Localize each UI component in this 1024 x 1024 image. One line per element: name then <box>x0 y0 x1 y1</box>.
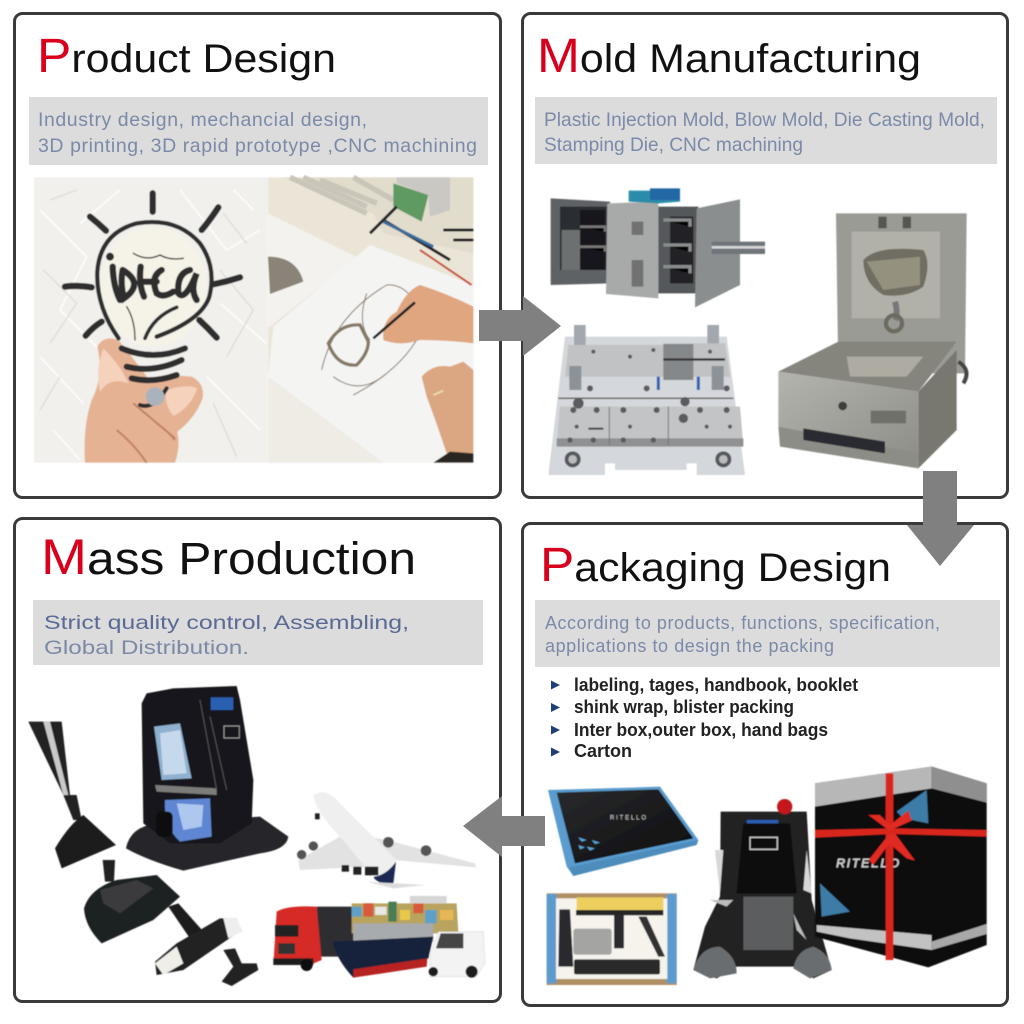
photo: vacuum in package view <box>693 799 832 978</box>
bullet list: shink wrap, blister packing <box>574 697 794 717</box>
description: mass production: Strict quality control, Assembling, <box>44 612 409 634</box>
photo: die casting mold <box>778 213 967 468</box>
photo: injection mold <box>551 188 765 307</box>
description: product design <box>29 97 488 165</box>
bullet list: labeling, tages, handbook, booklet <box>574 675 858 695</box>
heading: mold manufacturing: Mold Manufacturing <box>537 30 921 83</box>
photo: designer sketching on paper <box>268 177 473 463</box>
wand nozzle <box>28 722 116 868</box>
panel: mass production <box>14 518 500 1002</box>
arrow: mold to packaging <box>907 471 974 566</box>
photo: gift box with red ribbon <box>815 767 987 967</box>
description: product design: Industry design, mechancial design, <box>38 109 367 131</box>
description: mold manufacturing <box>535 97 997 164</box>
power head <box>84 860 258 986</box>
photo: idea light bulb drawn on crumpled paper <box>34 177 268 463</box>
bulb <box>65 193 240 406</box>
vacuum body <box>126 686 288 871</box>
panel: product design <box>14 14 500 498</box>
photo: open box with accessories <box>547 893 677 985</box>
heading: product design: Product Design <box>37 30 336 83</box>
photo: gift box with red ribbon: RITELLO <box>836 856 899 870</box>
bullet list: Carton <box>574 741 632 761</box>
photo: truck, cargo ship and van <box>273 896 485 978</box>
arrow: packaging to mass production <box>463 796 545 857</box>
description: packaging design: applications to design the packing <box>545 636 834 656</box>
description: mold manufacturing: Plastic Injection Mold, Blow Mold, Die Casting Mold, <box>544 109 985 131</box>
photo: product box, closed <box>548 787 698 876</box>
photo: vacuum cleaner and accessories <box>28 686 288 986</box>
arrow: design to mold <box>479 296 561 356</box>
heading: packaging design: Packaging Design <box>540 539 891 592</box>
description: mass production: Global Distribution. <box>44 637 249 659</box>
description: product design: 3D printing, 3D rapid prototype ,CNC machining <box>38 135 477 157</box>
heading: mass production: Mass Production <box>41 529 416 585</box>
description: packaging design: According to products, functions, specification, <box>545 613 940 633</box>
description: packaging design <box>535 600 1000 667</box>
bullet list: Inter box,outer box, hand bags <box>574 720 828 740</box>
photo: stamping die <box>548 325 745 475</box>
photo: product box, closed: RITELLO <box>610 815 646 821</box>
description: mold manufacturing: Stamping Die, CNC machining <box>544 134 803 156</box>
hand <box>85 338 203 463</box>
photo: airplane <box>297 792 476 888</box>
panel: mold manufacturing <box>522 14 1008 498</box>
panel: packaging design <box>522 524 1008 1006</box>
description: mass production <box>33 600 483 665</box>
bullet list <box>551 675 858 761</box>
